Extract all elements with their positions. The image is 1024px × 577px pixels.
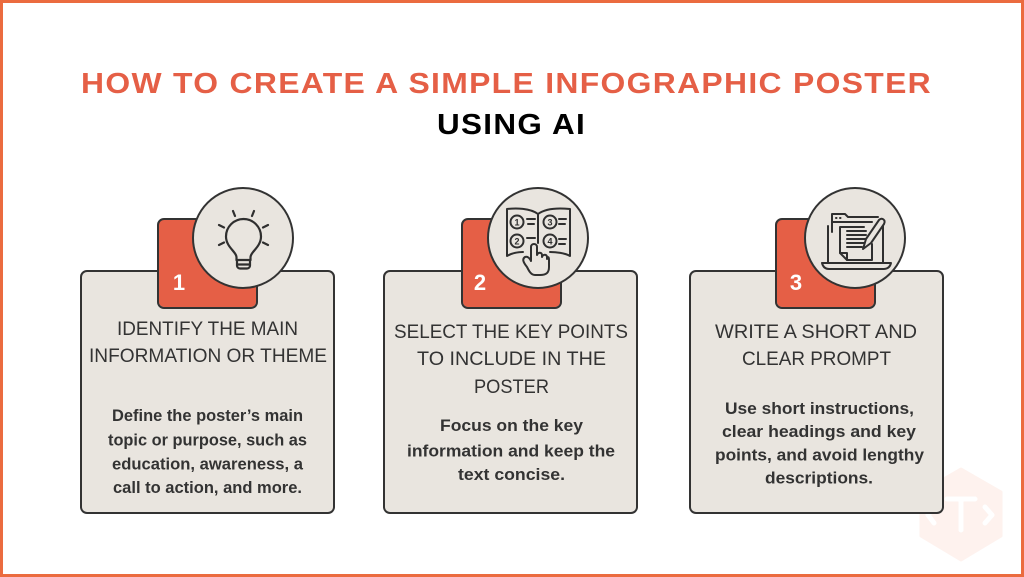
- heading: INFORMATION OR THEME: [89, 346, 327, 367]
- body text: [407, 417, 615, 484]
- number 1: 1: [173, 270, 185, 295]
- panel: step 2: [384, 188, 637, 513]
- red number tab: [462, 219, 561, 308]
- watermark logo: [921, 469, 1001, 560]
- icon circle: [488, 188, 588, 288]
- number 2: 2: [474, 270, 486, 295]
- heading: TO INCLUDE IN THE: [417, 349, 606, 370]
- heading: CLEAR PROMPT: [742, 349, 891, 370]
- card box: [384, 271, 637, 513]
- card box: [690, 271, 943, 513]
- body text: information and keep the: [407, 442, 615, 460]
- body text: Use short instructions,: [725, 400, 914, 418]
- icon: laptop with document and pen: [822, 214, 891, 269]
- title line 1: HOW TO CREATE A SIMPLE INFOGRAPHIC POSTER: [81, 68, 932, 100]
- numerals inside icon: [514, 218, 553, 246]
- red number tab: [158, 219, 257, 308]
- icon circle: [193, 188, 293, 288]
- body text: education, awareness, a: [112, 456, 304, 474]
- heading: POSTER: [474, 377, 549, 398]
- body text: [715, 400, 925, 488]
- panel: step 1: [81, 188, 334, 513]
- body text: Define the poster’s main: [112, 407, 303, 425]
- body text: [108, 407, 307, 497]
- heading: SELECT THE KEY POINTS: [394, 322, 628, 343]
- body text: topic or purpose, such as: [108, 432, 307, 450]
- heading: [394, 322, 628, 398]
- panel: step 3: [690, 188, 943, 513]
- numerals inside icon: 2: [514, 236, 520, 246]
- body text: descriptions.: [765, 470, 873, 488]
- title: [81, 68, 932, 141]
- heading: [715, 322, 917, 370]
- body text: call to action, and more.: [113, 479, 302, 497]
- title line 2: USING AI: [437, 109, 586, 141]
- numerals inside icon: 3: [547, 218, 553, 228]
- heading: WRITE A SHORT AND: [715, 322, 917, 343]
- body text: Focus on the key: [440, 417, 584, 435]
- red number tab: [776, 219, 875, 308]
- body text: text concise.: [458, 466, 565, 484]
- heading: IDENTIFY THE MAIN: [117, 319, 298, 340]
- icon circle: [805, 188, 905, 288]
- card box: [81, 271, 334, 513]
- numerals inside icon: 1: [514, 218, 520, 228]
- body text: points, and avoid lengthy: [715, 446, 925, 464]
- numerals inside icon: 4: [547, 236, 553, 246]
- icon: light bulb: [219, 211, 268, 268]
- icon: open book with hand: [507, 209, 570, 275]
- heading: [89, 319, 327, 367]
- body text: clear headings and key: [722, 423, 917, 441]
- number 3: 3: [790, 270, 802, 295]
